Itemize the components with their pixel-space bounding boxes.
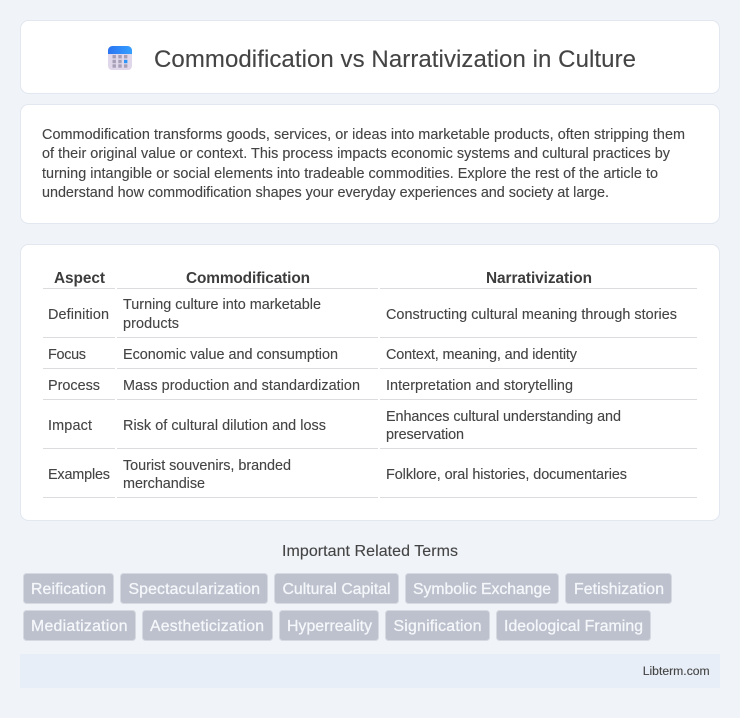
intro paragraph: Commodification transforms goods, services, or ideas into marketable products, often stripping them xyxy=(42,127,685,143)
row: process: Interpretation and storytelling xyxy=(386,378,573,394)
panel: comparison table xyxy=(20,244,720,520)
row: focus: Focus xyxy=(48,347,86,363)
row: impact xyxy=(48,409,621,443)
row: definition xyxy=(48,297,677,332)
row: process: Mass production and standardization xyxy=(123,378,360,394)
row: examples: Examples xyxy=(48,467,110,483)
panel: header xyxy=(20,20,720,94)
intro paragraph: turning intangible or social elements into tradeable commodities. Explore the rest of the article to xyxy=(42,166,658,182)
tag: Aestheticization: Aestheticization xyxy=(150,618,264,635)
row: definition: Turning culture into marketable xyxy=(123,297,321,313)
row: definition: Constructing cultural meaning through stories xyxy=(386,307,677,323)
row: definition: products xyxy=(123,316,179,332)
tag: Fetishization xyxy=(566,574,672,604)
table header: Aspect xyxy=(54,270,105,287)
row: examples: Folklore, oral histories, documentaries xyxy=(386,467,627,483)
icon: calendar xyxy=(108,46,132,70)
table header xyxy=(54,270,592,287)
tag: Cultural Capital xyxy=(274,574,398,604)
title: Commodification vs Narrativization in Culture xyxy=(154,46,636,73)
intro paragraph: of their original value or context. This process impacts economic systems and cultural practices by xyxy=(42,146,671,162)
row: focus xyxy=(48,347,578,363)
tag: Reification xyxy=(24,574,114,604)
tag: Mediatization xyxy=(24,610,136,640)
tag: Aestheticization xyxy=(142,610,272,640)
row: focus: Context, meaning, and identity xyxy=(386,347,578,363)
table row lines xyxy=(43,288,697,498)
row: focus: Economic value and consumption xyxy=(123,347,338,363)
tag: Mediatization: Mediatization xyxy=(31,618,128,635)
row: impact: Enhances cultural understanding and xyxy=(386,409,621,425)
footer credit: Libterm.com xyxy=(643,664,710,678)
intro paragraph xyxy=(42,127,685,201)
tag: Ideological Framing: Ideological Framing xyxy=(504,618,643,635)
tag: Hyperreality xyxy=(280,610,378,640)
tag: Signification: Signification xyxy=(394,618,482,635)
tag: Spectacularization: Spectacularization xyxy=(128,581,260,598)
row: examples: Tourist souvenirs, branded xyxy=(123,458,291,474)
heading: important related terms: Important Related Terms xyxy=(282,543,458,560)
tag: Ideological Framing xyxy=(496,610,650,640)
panel: introduction xyxy=(20,104,720,224)
intro paragraph: understand how commodification shapes your everyday experiences and society at large. xyxy=(42,185,609,201)
row: impact: preservation xyxy=(386,427,464,443)
table header: Narrativization xyxy=(486,270,592,287)
tag: Reification: Reification xyxy=(31,581,106,598)
tag: Signification xyxy=(386,610,490,640)
row: definition: Definition xyxy=(48,307,109,323)
row: impact: Risk of cultural dilution and loss xyxy=(123,418,326,434)
tag: Hyperreality: Hyperreality xyxy=(287,618,372,635)
tags: related terms xyxy=(24,574,672,640)
tag: Cultural Capital: Cultural Capital xyxy=(282,581,390,598)
tag: Symbolic Exchange xyxy=(406,574,558,604)
tag: Symbolic Exchange: Symbolic Exchange xyxy=(413,581,551,598)
row: impact: Impact xyxy=(48,418,92,434)
tag: Fetishization: Fetishization xyxy=(574,581,664,598)
row: examples xyxy=(48,458,627,492)
row: examples: merchandise xyxy=(123,476,205,492)
footer xyxy=(20,654,720,688)
table header: Commodification xyxy=(186,270,310,287)
tag: Spectacularization xyxy=(120,574,268,604)
row: process xyxy=(48,378,573,394)
row: process: Process xyxy=(48,378,100,394)
